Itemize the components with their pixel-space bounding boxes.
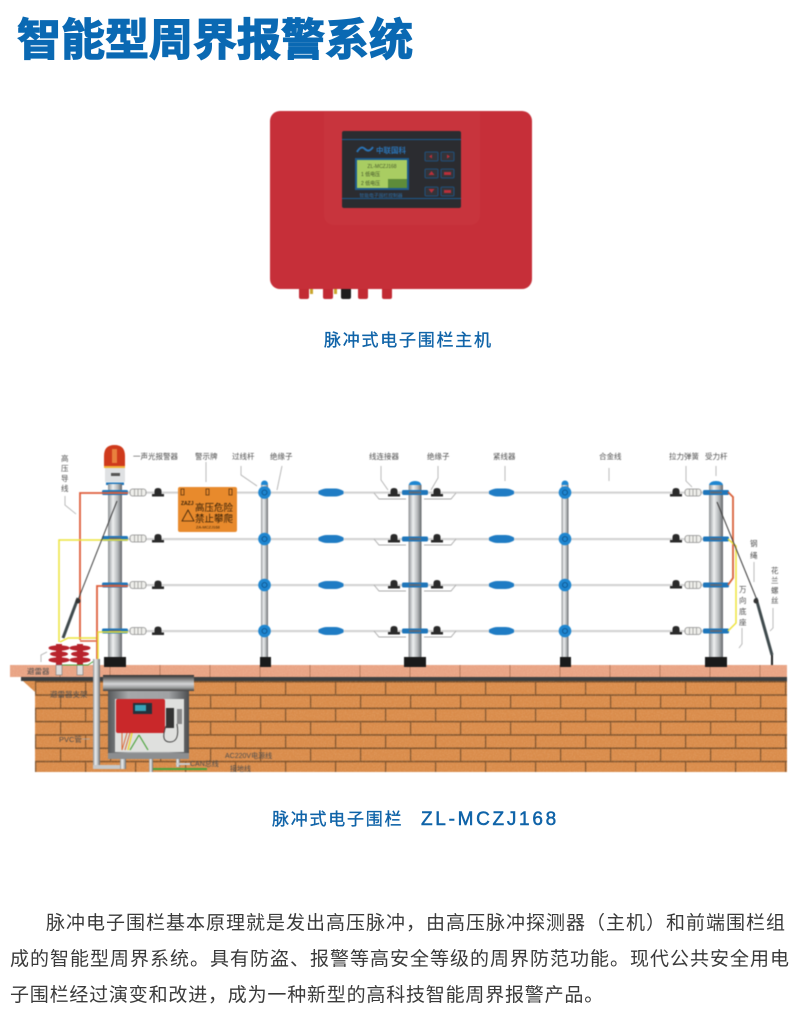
connectors bbox=[299, 286, 392, 299]
right-side jumpers and guy wire bbox=[717, 492, 772, 665]
component labels: PVC管 bbox=[59, 734, 82, 744]
buried enclosure bbox=[103, 675, 194, 759]
warning sign: 高压危险 bbox=[195, 502, 234, 514]
component labels: 避雷器 bbox=[27, 666, 50, 676]
component labels: 向 bbox=[739, 595, 746, 605]
warning sign: ZA-MCZJ168 bbox=[196, 524, 221, 530]
component labels: 合金线 bbox=[599, 451, 622, 461]
component labels: 线连接器 bbox=[369, 451, 399, 461]
component labels: 拉力弹簧 bbox=[669, 451, 699, 461]
panel caption: 智能电子围栏控制器 bbox=[359, 192, 403, 199]
component labels: 一声光报警器 bbox=[133, 451, 178, 461]
springs and insulators at strain post bbox=[670, 488, 701, 634]
component labels: 螺 bbox=[771, 585, 779, 595]
thin post 2 bbox=[559, 480, 571, 667]
component labels: 座 bbox=[739, 617, 747, 627]
component labels: 万 bbox=[739, 585, 747, 594]
strain post bbox=[703, 481, 729, 667]
warning sign: ZAZJ bbox=[181, 501, 194, 507]
component labels: CAN总线 bbox=[190, 759, 219, 768]
body paragraph: 脉冲电子围栏基本原理就是发出高压脉冲，由高压脉冲探测器（主机）和前端围栏组 bbox=[46, 913, 786, 934]
component labels: 丝 bbox=[771, 595, 779, 605]
component labels: 兰 bbox=[771, 575, 779, 585]
component labels: 绝缘子 bbox=[427, 451, 450, 461]
component labels: 过线杆 bbox=[232, 451, 255, 461]
enclosed host unit bbox=[116, 699, 165, 733]
brand logo: 中联国科 bbox=[376, 145, 406, 155]
component labels: 紧线器 bbox=[493, 451, 516, 461]
body paragraph: 子围栏经过演变和改进，成为一种新型的高科技智能周界报警产品。 bbox=[10, 985, 604, 1006]
title: 智能型周界报警系统 bbox=[17, 16, 413, 65]
wire tensioners bbox=[318, 488, 514, 635]
body paragraph bbox=[10, 912, 790, 1006]
centre post bbox=[374, 481, 456, 667]
wall: ground cap and brick bbox=[10, 665, 787, 772]
component labels: 压 bbox=[61, 464, 69, 473]
main post bbox=[102, 484, 128, 667]
component labels: AC220V电源线 bbox=[225, 751, 272, 760]
left-side high-voltage leads bbox=[59, 493, 128, 660]
lightning arresters bbox=[48, 644, 94, 675]
raised front panel bbox=[324, 112, 480, 225]
keypad bbox=[425, 152, 454, 196]
component labels: 导 bbox=[61, 474, 69, 483]
alarm beacon bbox=[104, 445, 125, 485]
PVC pipes bbox=[93, 659, 207, 772]
control panel bbox=[342, 131, 461, 208]
LCD screen: 2 低电压 bbox=[361, 180, 380, 187]
warning sign: 禁止攀爬 bbox=[195, 513, 234, 525]
leader lines bbox=[41, 462, 773, 739]
body paragraph: 成的智能型周界系统。具有防盗、报警等高安全等级的周界防范功能。现代公共安全用电 bbox=[10, 949, 790, 970]
caption: host unit: 脉冲式电子围栏主机 bbox=[324, 331, 493, 350]
product image: pulse fence host unit bbox=[269, 110, 533, 300]
component labels: 高 bbox=[61, 453, 69, 463]
component labels: 线 bbox=[61, 483, 69, 493]
component labels: 绝缘子 bbox=[270, 451, 293, 461]
enclosure bbox=[270, 111, 532, 289]
caption: fence diagram: 脉冲式电子围栏 bbox=[272, 810, 403, 829]
springs and insulators at main post bbox=[130, 488, 164, 635]
LCD screen: ZL-MCZJ168 bbox=[367, 164, 397, 170]
caption: fence diagram bbox=[272, 809, 559, 830]
fence wires bbox=[128, 492, 718, 632]
thin post 1 bbox=[258, 480, 271, 667]
component labels: 绳 bbox=[750, 550, 758, 560]
component labels: 钢 bbox=[750, 538, 758, 548]
component labels: 避雷器支架 bbox=[50, 689, 88, 699]
LCD screen bbox=[355, 158, 409, 190]
warning sign bbox=[178, 487, 237, 532]
component labels: 受力杆 bbox=[705, 451, 728, 461]
component labels: 花 bbox=[771, 565, 779, 575]
caption: fence diagram: ZL-MCZJ168 bbox=[421, 809, 559, 830]
component labels bbox=[27, 451, 779, 773]
component labels: 接地线 bbox=[230, 764, 251, 773]
component labels: 警示牌 bbox=[195, 451, 218, 461]
LCD screen: 1 低电压 bbox=[361, 171, 380, 178]
component labels: 底 bbox=[739, 606, 747, 616]
